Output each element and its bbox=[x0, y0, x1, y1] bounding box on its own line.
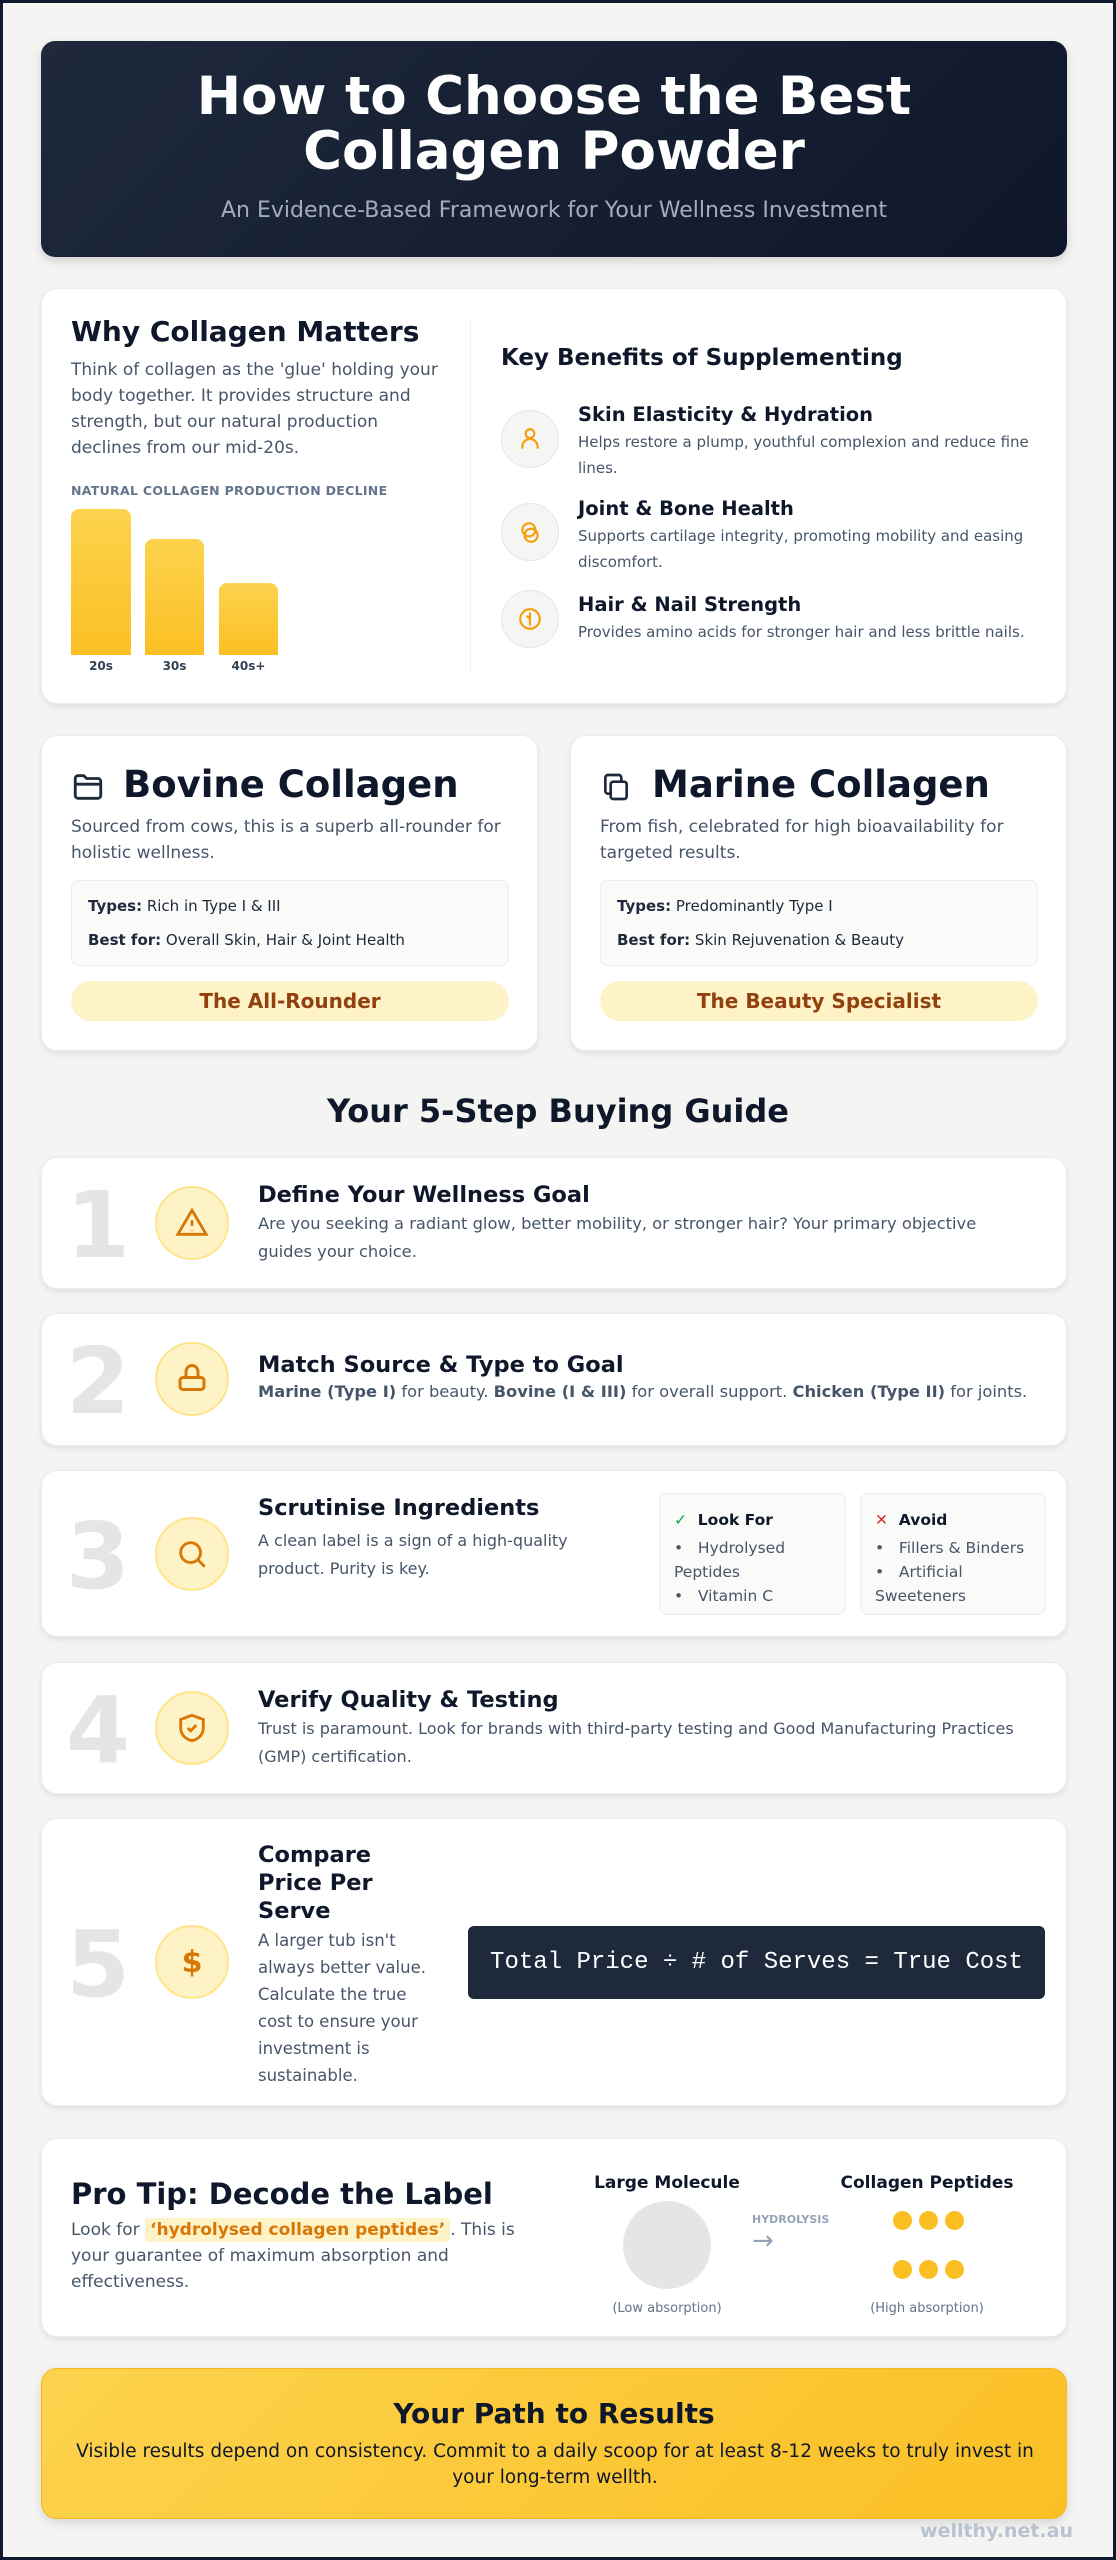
pill: all-rounder: The All-Rounder bbox=[199, 989, 381, 1013]
panel: pro tip bbox=[41, 2138, 1067, 2337]
subtitle: An Evidence-Based Framework for Your Wellness Investment bbox=[221, 198, 887, 223]
icon: large molecule bbox=[623, 2201, 711, 2289]
step 2: 2 bbox=[66, 1328, 130, 1435]
box: avoid: • Artificial Sweeteners bbox=[875, 1563, 966, 1605]
step 5 text: A larger tub isn't always better value. Calculate the true cost to ensure your investment is sustainable. bbox=[258, 1931, 426, 2085]
benefits list: Helps restore a plump, youthful complexion and reduce fine lines. bbox=[578, 433, 1029, 477]
icon: folder bbox=[74, 774, 102, 800]
diagram: hydrolysis: Collagen Peptides bbox=[841, 2173, 1013, 2193]
text block: intro: Think of collagen as the 'glue' holding your body together. It provides structure and strength, but our natural production declines from our mid-20s. bbox=[71, 360, 438, 458]
step 1 text: Are you seeking a radiant glow, better mobility, or stronger hair? Your primary objective guides your choice. bbox=[258, 1214, 976, 1261]
benefits list: Supports cartilage integrity, promoting mobility and easing discomfort. bbox=[578, 527, 1023, 571]
heading: path to results: Your Path to Results bbox=[393, 2397, 715, 2430]
diagram: hydrolysis: Large Molecule bbox=[594, 2173, 740, 2193]
bar chart: 40s+ bbox=[232, 659, 265, 673]
diagram: hydrolysis bbox=[594, 2173, 1013, 2316]
step 2 title: Match Source & Type to Goal bbox=[258, 1352, 624, 1378]
heading: 5-step buying guide: Your 5-Step Buying Guide bbox=[327, 1092, 789, 1130]
text: marine description: From fish, celebrated for high bioavailability for targeted results. bbox=[600, 817, 1004, 863]
step 1: 1 bbox=[66, 1172, 130, 1279]
title bbox=[197, 66, 911, 182]
info box: bovine: Best for: Overall Skin, Hair & Joint Health bbox=[88, 931, 405, 949]
arrow: hydrolysis bbox=[752, 2213, 829, 2256]
step 2 bbox=[41, 1313, 1067, 1446]
benefit: hair: Hair & Nail Strength bbox=[578, 593, 801, 616]
step 4: 4 bbox=[66, 1677, 130, 1784]
info box: bovine: Types: Rich in Type I & III bbox=[88, 897, 281, 915]
bar chart: 30s bbox=[163, 659, 186, 673]
step 3 text: A clean label is a sign of a high-quality product. Purity is key. bbox=[258, 1531, 568, 1578]
box: look for bbox=[659, 1493, 846, 1615]
box: look for: • Vitamin C bbox=[674, 1587, 773, 1605]
icon: lock bbox=[155, 1342, 229, 1416]
box: avoid bbox=[860, 1493, 1046, 1615]
panel: why collagen matters bbox=[41, 288, 1067, 704]
text: pro tip: Look for ‘hydrolysed collagen peptides’ . This is your guarantee of maximum absorption and effectiveness. bbox=[71, 2220, 515, 2292]
benefit: joint: Joint & Bone Health bbox=[578, 497, 794, 520]
step 4 bbox=[41, 1662, 1067, 1794]
bar chart bbox=[71, 509, 278, 673]
pill: beauty specialist bbox=[600, 981, 1038, 1021]
formula box bbox=[468, 1926, 1045, 1999]
benefits list: Provides amino acids for stronger hair and less brittle nails. bbox=[578, 623, 1025, 641]
diagram: hydrolysis: (Low absorption) bbox=[612, 2301, 722, 2316]
icon: dollar bbox=[155, 1925, 229, 1999]
heading: bovine: Bovine Collagen bbox=[123, 763, 459, 806]
icon: search bbox=[155, 1517, 229, 1591]
heading: key benefits: Key Benefits of Supplementing bbox=[501, 345, 903, 371]
step 1 title: Define Your Wellness Goal bbox=[258, 1182, 590, 1208]
step 5: 5 bbox=[66, 1911, 130, 2018]
icon: shield bbox=[155, 1691, 229, 1765]
icon: warning bbox=[155, 1186, 229, 1260]
benefits list bbox=[501, 403, 1029, 648]
icon: hair bbox=[501, 590, 559, 648]
diagram: hydrolysis: (High absorption) bbox=[870, 2301, 984, 2316]
text: bovine description: Sourced from cows, this is a superb all-rounder for holistic wellness. bbox=[71, 817, 501, 863]
step 4 title: Verify Quality & Testing bbox=[258, 1687, 559, 1713]
benefit: skin: Skin Elasticity & Hydration bbox=[578, 403, 873, 426]
panel: marine collagen bbox=[570, 735, 1067, 1051]
panel: bovine collagen bbox=[41, 735, 538, 1051]
arrow: hydrolysis: → bbox=[752, 2226, 774, 2256]
title: How to Choose the Best bbox=[197, 66, 911, 127]
icon: copy bbox=[604, 774, 628, 800]
pill: all-rounder bbox=[71, 981, 509, 1021]
step 4 text: Trust is paramount. Look for brands with third-party testing and Good Manufacturing Practices (GMP) certification. bbox=[258, 1719, 1014, 1766]
icon: person bbox=[501, 410, 559, 468]
info box: marine: Types: Predominantly Type I bbox=[617, 897, 833, 915]
step 5 bbox=[41, 1818, 1067, 2106]
heading: pro tip: Pro Tip: Decode the Label bbox=[71, 2177, 493, 2211]
step 3 title: Scrutinise Ingredients bbox=[258, 1495, 539, 1521]
header bbox=[41, 41, 1067, 257]
icon: dollar: $ bbox=[182, 1944, 202, 1980]
step 2 text: Marine (Type I) for beauty. Bovine (I & III) for overall support. Chicken (Type II) for joints. bbox=[258, 1382, 1027, 1401]
icon: peptide dots bbox=[893, 2211, 964, 2279]
watermark: wellthy.net.au bbox=[920, 2520, 1073, 2542]
step 1 bbox=[41, 1157, 1067, 1289]
icon: joint bbox=[501, 503, 559, 561]
box: look for: • Hydrolysed Peptides bbox=[674, 1539, 785, 1581]
text: path to results: Visible results depend on consistency. Commit to a daily scoop for at least 8-12 weeks to truly invest in your long-term wellth. bbox=[76, 2441, 1034, 2488]
formula box: Total Price ÷ # of Serves = True Cost bbox=[490, 1949, 1023, 1976]
heading: why collagen matters: Why Collagen Matters bbox=[71, 315, 419, 348]
pill: beauty specialist: The Beauty Specialist bbox=[697, 989, 941, 1013]
info box: bovine bbox=[71, 880, 509, 966]
box: avoid: • Fillers & Binders bbox=[875, 1539, 1024, 1557]
box: look for: ✓ Look For bbox=[674, 1511, 773, 1529]
info box: marine bbox=[600, 880, 1038, 966]
step 5 title: Compare Price Per Serve bbox=[258, 1842, 373, 1924]
heading: marine: Marine Collagen bbox=[652, 763, 990, 806]
chart label: NATURAL COLLAGEN PRODUCTION DECLINE bbox=[71, 483, 387, 498]
box: avoid: ✕ Avoid bbox=[875, 1511, 947, 1529]
bar chart: 20s bbox=[89, 659, 113, 673]
title: Collagen Powder bbox=[303, 121, 805, 182]
arrow: hydrolysis: HYDROLYSIS bbox=[752, 2213, 829, 2226]
panel: path to results bbox=[41, 2368, 1067, 2519]
step 3: 3 bbox=[66, 1503, 130, 1610]
info box: marine: Best for: Skin Rejuvenation & Beauty bbox=[617, 931, 904, 949]
step 3 bbox=[41, 1470, 1067, 1637]
